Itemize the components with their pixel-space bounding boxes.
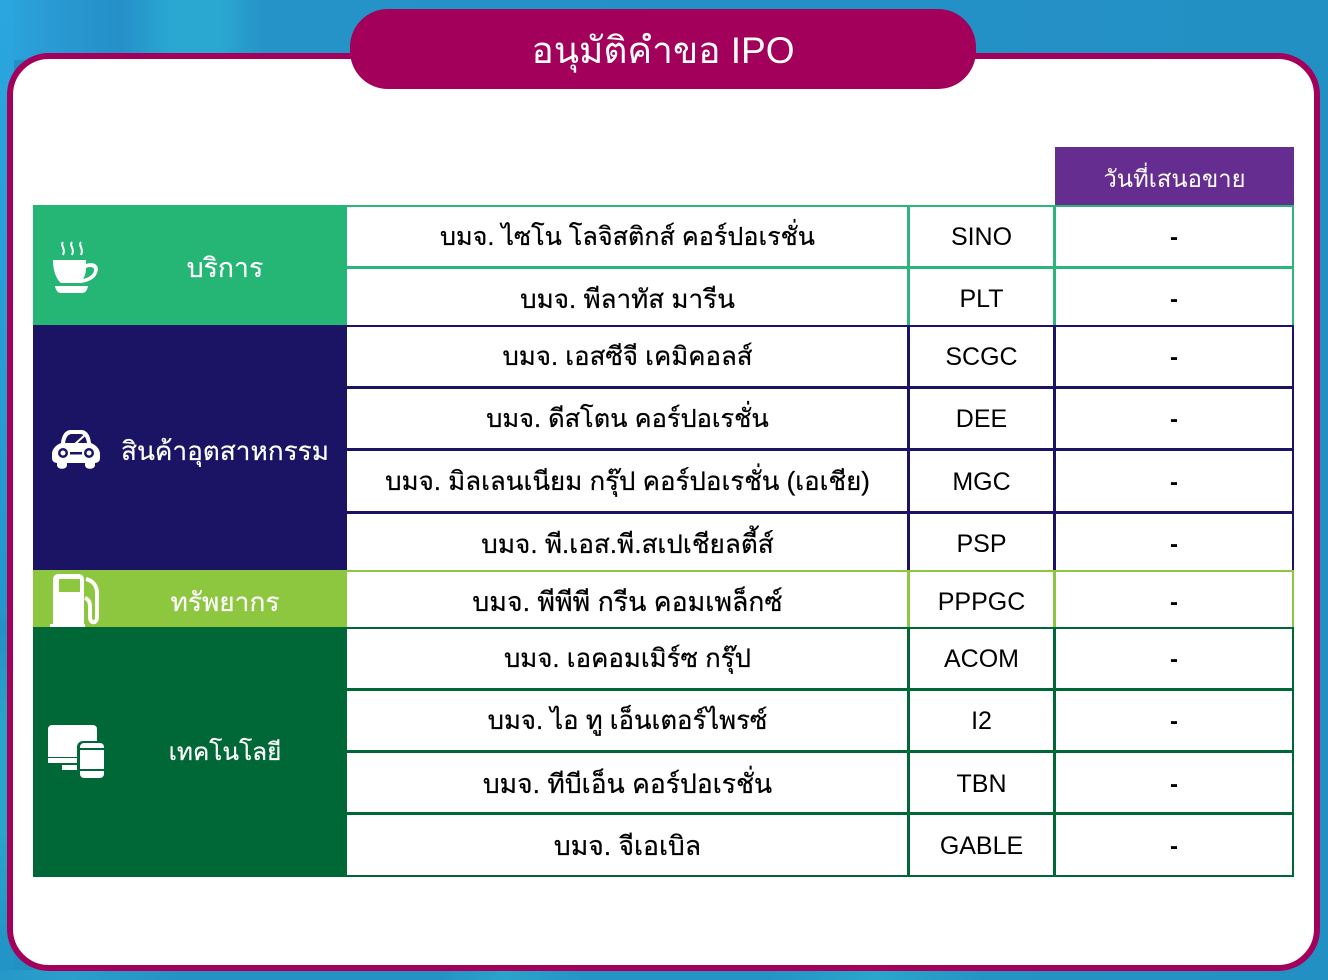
icon: fuel pump	[50, 574, 99, 627]
row: SINO: SINO	[951, 223, 1012, 251]
row: I2	[347, 689, 1294, 751]
row: PLT: -	[1170, 286, 1178, 313]
row: MGC: MGC	[952, 468, 1011, 496]
table: industrial rows	[385, 342, 1178, 559]
row: SINO: บมจ. ไซโน โลจิสติกส์ คอร์ปอเรชั่น	[440, 223, 815, 251]
row: SCGC: บมจ. เอสซีจี เคมิคอลส์	[502, 343, 753, 371]
row: PPPGC: -	[1170, 589, 1178, 616]
row: PLT	[347, 267, 1294, 325]
row: PLT: PLT	[960, 285, 1004, 313]
row: SCGC	[347, 325, 1294, 387]
row: I2: บมจ. ไอ ทู เอ็นเตอร์ไพรซ์	[488, 707, 767, 735]
row: GABLE: บมจ. จีเอเบิล	[554, 831, 701, 861]
row: SINO	[347, 205, 1294, 267]
table: resources row	[472, 586, 1178, 617]
row: PPPGC: บมจ. พีพีพี กรีน คอมเพล็กซ์	[472, 587, 783, 617]
category: resources: ทรัพยากร	[170, 587, 280, 617]
row: PLT: บมจ. พีลาทัส มารีน	[520, 284, 735, 314]
row: ACOM: ACOM	[944, 645, 1019, 673]
row: TBN	[347, 752, 1294, 814]
row: PPPGC: PPPGC	[938, 588, 1025, 616]
row: SCGC: SCGC	[945, 343, 1018, 371]
category: services: บริการ	[187, 253, 263, 283]
row: PPPGC	[347, 570, 1294, 627]
icon: devices	[48, 725, 104, 778]
row: GABLE: -	[1170, 833, 1178, 860]
category: technology: เทคโนโลยี	[169, 739, 281, 766]
icon: car	[52, 430, 100, 469]
category: services	[33, 205, 347, 325]
category: resources	[33, 570, 347, 627]
category: industrial goods	[33, 325, 347, 570]
row: PSP: PSP	[956, 530, 1007, 558]
title banner	[350, 9, 976, 89]
row: DEE	[347, 387, 1294, 449]
title banner: อนุมัติคำขอ IPO	[532, 30, 794, 71]
row: ACOM	[347, 627, 1294, 689]
category: technology	[33, 627, 347, 877]
category: industrial goods: สินค้าอุตสาหกรรม	[121, 436, 329, 466]
row: GABLE	[347, 814, 1294, 876]
row: ACOM: บมจ. เอคอมเมิร์ซ กรุ๊ป	[504, 645, 751, 673]
row: PSP: -	[1170, 531, 1178, 558]
row: MGC: -	[1170, 469, 1178, 496]
table: technology rows	[483, 644, 1178, 861]
row: PSP	[347, 512, 1294, 570]
icon: coffee cup	[53, 241, 98, 293]
row: SINO: -	[1170, 224, 1178, 251]
row: ACOM: -	[1170, 646, 1178, 673]
row: DEE: -	[1170, 406, 1178, 433]
column header: offering date	[1055, 147, 1294, 205]
row: SCGC: -	[1170, 344, 1178, 371]
row: MGC: บมจ. มิลเลนเนียม กรุ๊ป คอร์ปอเรชั่น (เอเชีย)	[385, 468, 870, 496]
row: I2: -	[1170, 708, 1178, 735]
row: I2: I2	[971, 707, 992, 735]
row: MGC	[347, 450, 1294, 512]
row: DEE: DEE	[956, 405, 1007, 433]
row: TBN: บมจ. ทีบีเอ็น คอร์ปอเรชั่น	[483, 769, 772, 799]
row: TBN: -	[1170, 771, 1178, 798]
row: DEE: บมจ. ดีสโตน คอร์ปอเรชั่น	[486, 405, 769, 433]
row: GABLE: GABLE	[940, 832, 1023, 860]
row: TBN: TBN	[956, 770, 1006, 798]
row: PSP: บมจ. พี.เอส.พี.สเปเชียลตี้ส์	[481, 529, 774, 559]
column header: offering date: วันที่เสนอขาย	[1103, 166, 1246, 193]
table: services rows	[440, 218, 1178, 314]
